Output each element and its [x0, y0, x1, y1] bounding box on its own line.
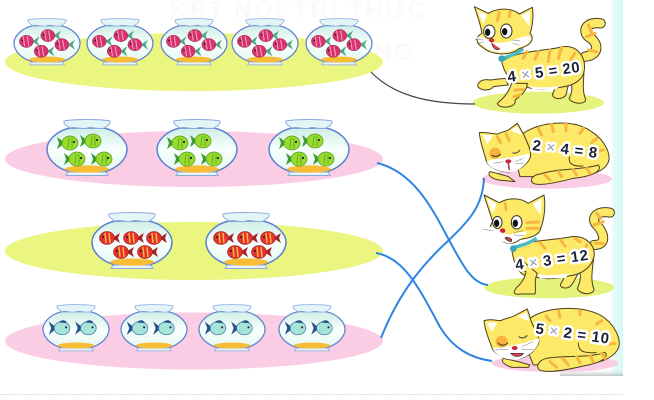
group: two bowls of red fish — [5, 212, 383, 280]
group: three bowls of green fish — [5, 120, 383, 187]
bowl row — [14, 19, 372, 65]
group: five bowls of pink fish — [5, 19, 383, 91]
cat: standing, 4 x 5 = 20: 4 × 5 = 20 — [507, 59, 581, 86]
watermark — [170, 0, 425, 66]
bowl row — [43, 305, 345, 351]
cat: worried standing, 4 x 3 = 12 — [483, 195, 614, 298]
lime ellipse base — [5, 222, 383, 280]
bottom page shadow — [560, 368, 623, 376]
cat: sleeping, 2 x 4 = 8: 2 × 4 = 8 — [532, 137, 598, 162]
pink ellipse base — [5, 131, 383, 187]
cat: standing, 4 x 5 = 20 — [473, 7, 604, 114]
connector: green fish bowls to 4 x 3 = 12 — [377, 163, 488, 285]
cyan page edge strip — [610, 0, 623, 376]
lime ellipse base — [5, 33, 383, 91]
bowl row — [92, 212, 286, 268]
cat: worried standing, 4 x 3 = 12: 4 × 3 = 12 — [514, 247, 589, 274]
dotted bottom rule — [0, 394, 623, 396]
group: four bowls of blue fish — [5, 305, 383, 370]
connector: pink fish bowls to 4 x 5 = 20 — [371, 72, 475, 104]
watermark: VỚI CUỘC SỐNG — [185, 38, 413, 66]
connector: blue fish bowls to 2 x 4 = 8 — [381, 178, 484, 338]
connector: red fish bowls to 5 x 2 = 10 — [376, 253, 492, 361]
pink ellipse base — [5, 312, 383, 370]
cat: sleeping, 5 x 2 = 10: 5 × 2 = 10 — [534, 320, 610, 348]
bowl row — [47, 120, 349, 176]
cat: sleeping, 5 x 2 = 10 — [484, 308, 619, 372]
cat: sleeping, 2 x 4 = 8 — [479, 123, 612, 189]
